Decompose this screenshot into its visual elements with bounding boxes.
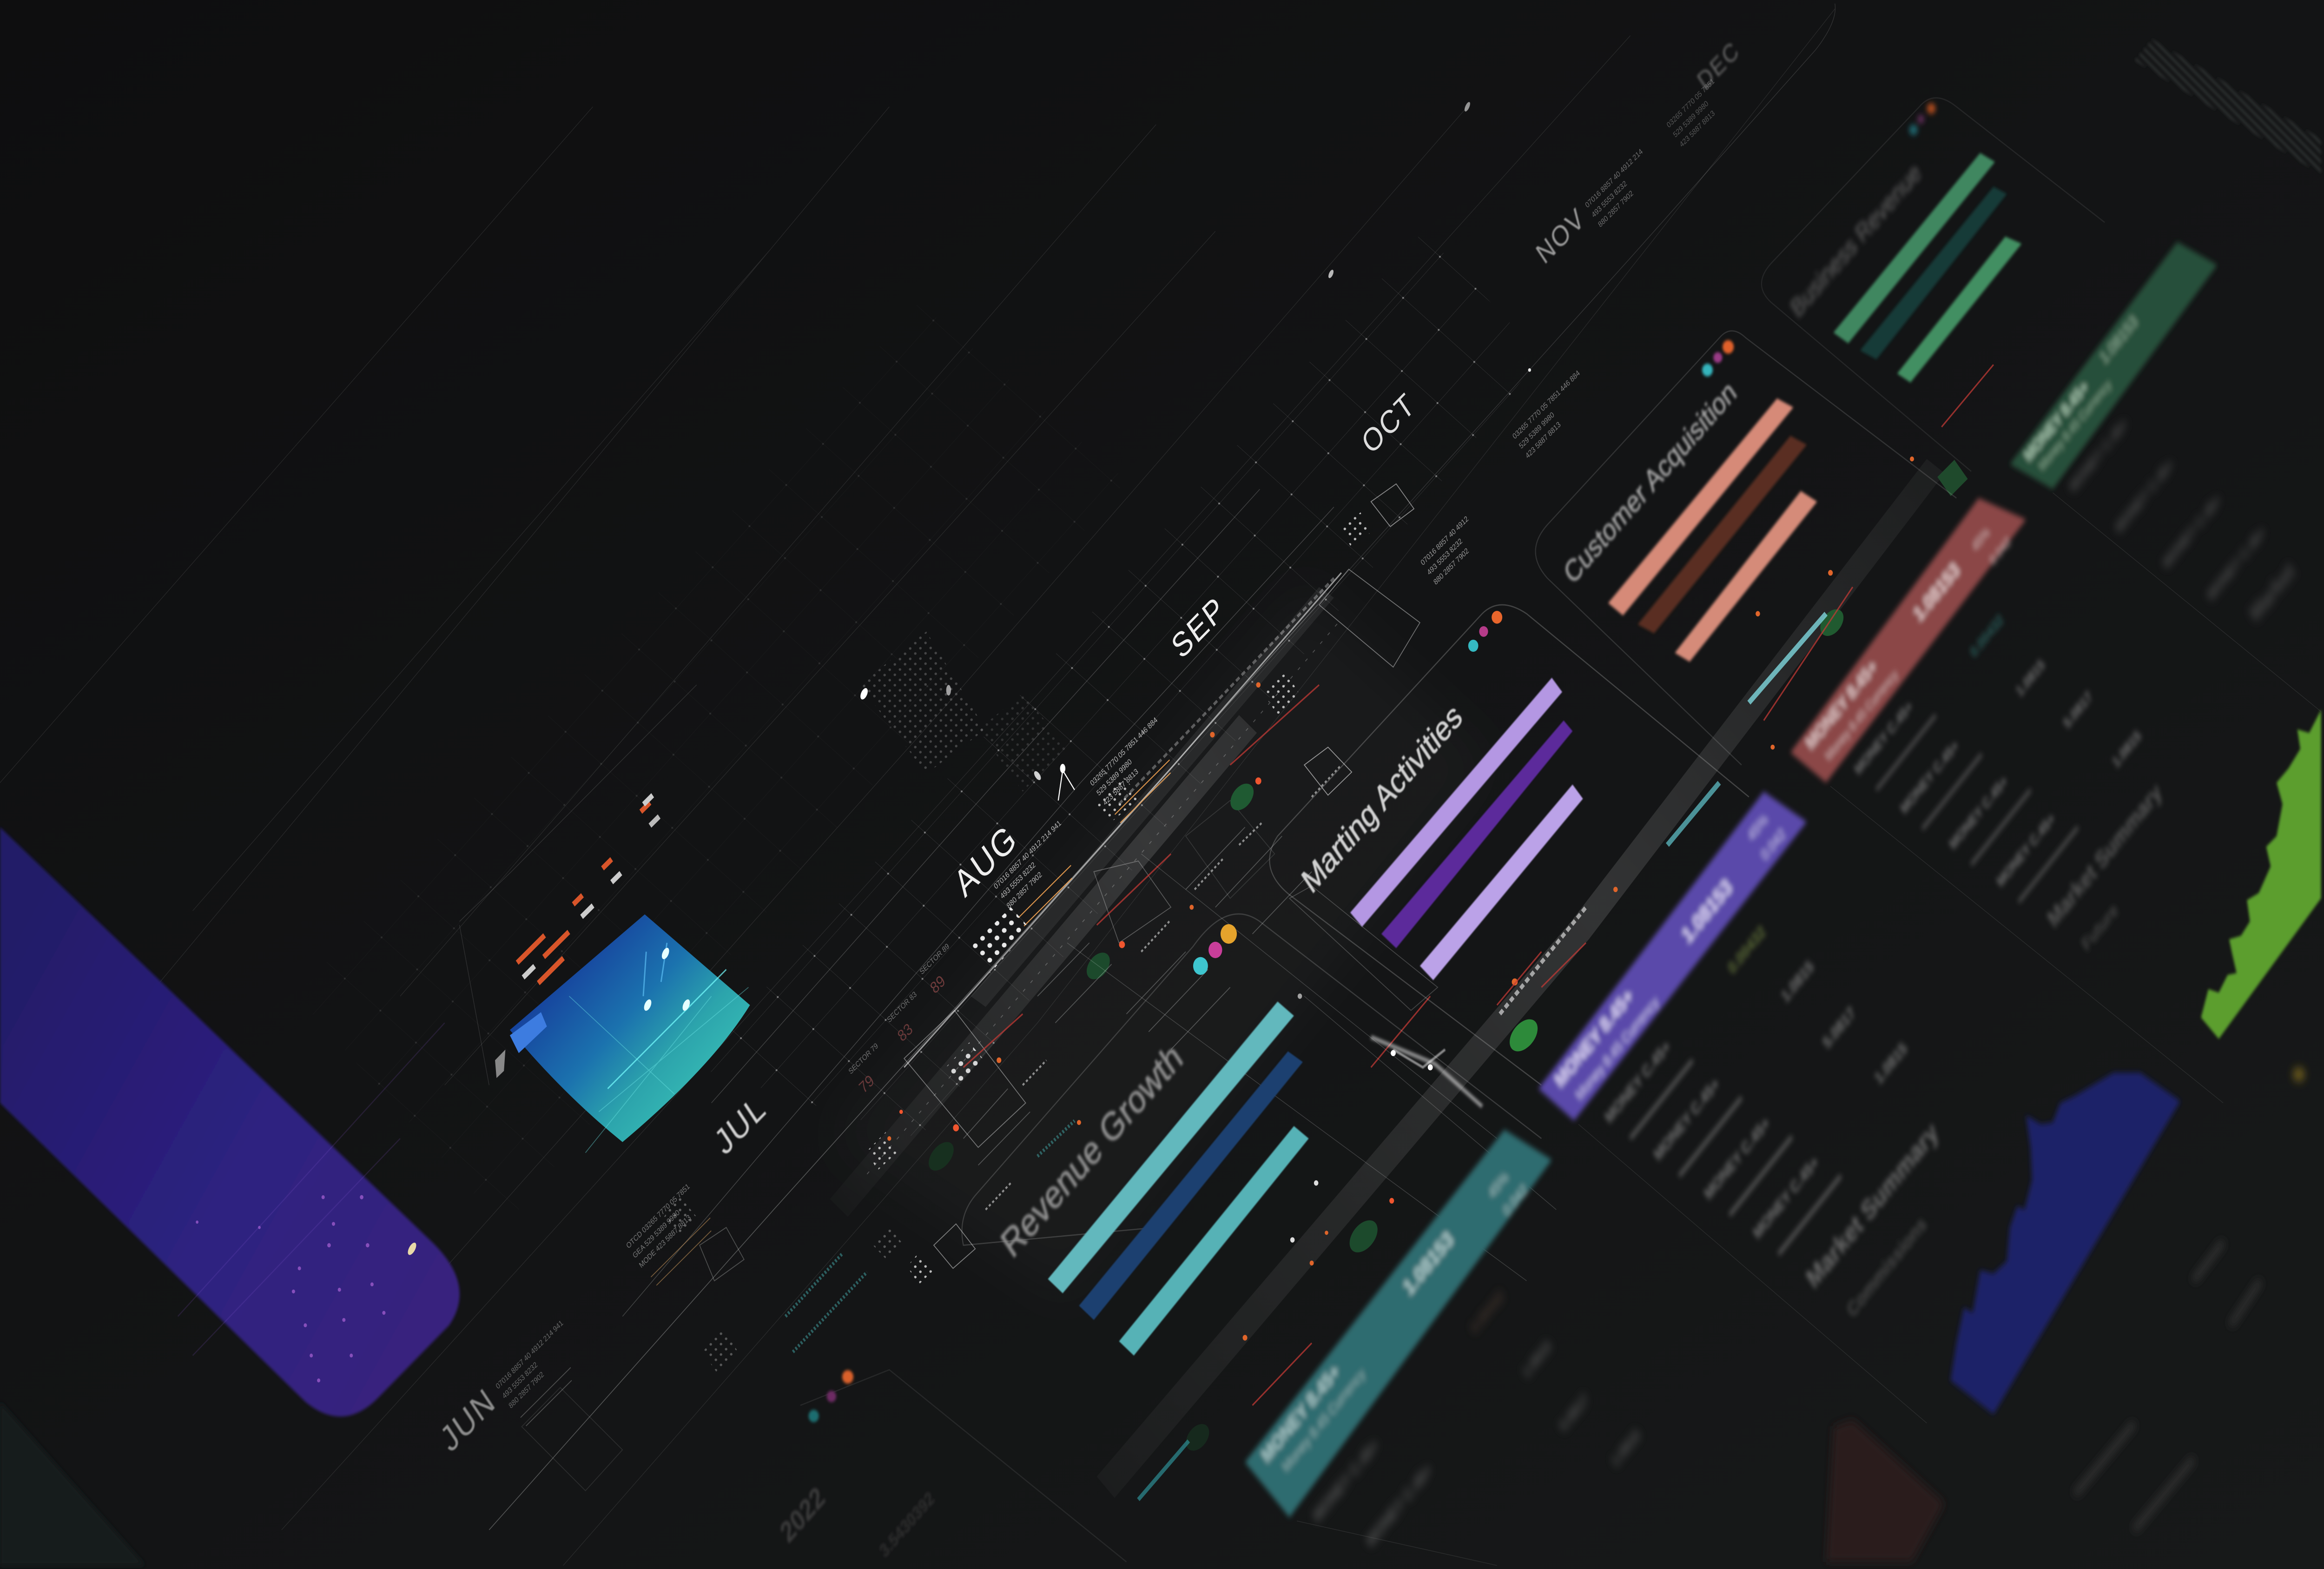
summary rows: green column: MONEY C.45+	[2205, 523, 2268, 604]
summary rows: teal column: 1.0815	[1520, 1337, 1554, 1381]
card: 2022 lower left	[776, 1370, 1126, 1562]
sub label: 3.5430392	[877, 1488, 938, 1562]
summary rows: teal column: 5.0817	[1557, 1391, 1591, 1435]
summary rows: purple column: 5.0817	[1820, 1003, 1858, 1053]
chart: green area	[2201, 710, 2321, 1039]
bars	[1834, 153, 2021, 383]
band labels: MONEY 8.45+	[1552, 985, 1637, 1092]
hud: numeric readouts along the timeline: 880 2857 7902	[1005, 870, 1043, 910]
panel: green summary band: Money 8.45 Currency	[2037, 377, 2113, 474]
hub traces and node lights	[786, 578, 1826, 1500]
glow highlights	[859, 101, 1531, 801]
summary rows: red column: 0.00432	[1968, 611, 2006, 661]
decorative hatch, top right	[2134, 39, 2321, 174]
bars	[1350, 678, 1583, 980]
month labels	[434, 36, 1744, 1459]
panel: red summary band: 0.042	[1988, 535, 2013, 568]
status dots	[1193, 924, 1237, 975]
hud: numeric readouts along the timeline: 07016 8857 40 4912 214	[1584, 147, 1644, 210]
summary rows: red column: 1.0815	[2014, 656, 2047, 700]
summary rows: purple column: MONEY C.45+	[1702, 1113, 1773, 1204]
hud: numeric readouts along the timeline: 493 5553 8232	[501, 1361, 539, 1401]
panel: blue-teal screen	[495, 914, 750, 1153]
panel: violet gradient band	[0, 827, 460, 1417]
summary rows: teal column: MONEY C.45+	[1310, 1435, 1381, 1525]
section title: Market Summary	[2043, 778, 2166, 933]
bars	[1608, 398, 1817, 662]
panel: red summary band: 1.08153	[1911, 558, 1963, 626]
summary rows: red column: Future	[2079, 900, 2121, 955]
panel: teal summary band: Money 8.45 Currency	[1280, 1365, 1368, 1476]
hud: numeric readouts along the timeline: OTCD 03265 7770 05 7851	[625, 1182, 691, 1251]
title: Customer Acquisition	[1559, 375, 1741, 590]
hud: numeric readouts along the timeline: SECTOR 83	[886, 990, 918, 1025]
central soft glow	[830, 587, 1497, 1298]
band dots and highlight	[178, 1023, 445, 1383]
summary rows: red column: MONEY C.45+	[1898, 737, 1961, 817]
hud: numeric readouts along the timeline: 07016 8857 40 4912 214 941	[993, 819, 1063, 891]
card: Business Revenue	[1762, 98, 2105, 471]
month: AUG: AUG	[947, 816, 1023, 905]
panel: green summary band	[2010, 242, 2217, 489]
panel: bottom-left teal corner	[0, 1402, 145, 1565]
title: Business Revenue	[1786, 158, 1925, 323]
summary rows: green column: MONEY C.45+	[2067, 415, 2130, 496]
summary rows: purple column: 1.0815	[1778, 957, 1816, 1006]
panel: purple summary band: 1.08153	[1678, 874, 1736, 948]
summary rows: purple column: 1.0815	[1872, 1039, 1910, 1088]
hud: numeric readouts along the timeline: 79	[856, 1071, 877, 1097]
panel: purple summary band: Money 8.45 Currency	[1573, 993, 1661, 1104]
far right faint details	[2075, 1067, 2305, 1530]
month: OCT: OCT	[1356, 386, 1421, 461]
schematic square outlines	[522, 484, 1438, 1491]
status dots	[808, 1370, 853, 1422]
card: Customer Acquisition	[1536, 331, 1956, 765]
month: JUN: JUN	[434, 1380, 502, 1459]
hud: numeric readouts along the timeline: 493 5553 8232	[1426, 537, 1464, 577]
panel: teal summary band: 45%	[1486, 1169, 1511, 1202]
panel: purple summary band: 45%	[1745, 811, 1770, 844]
hud: numeric readouts along the timeline: 423 5887 8813	[1524, 420, 1562, 460]
hud: numeric readouts along the timeline: 880 2857 7902	[508, 1370, 545, 1410]
panel: purple summary band	[1538, 792, 1807, 1121]
summary rows: red column	[1852, 611, 2166, 955]
hud: numeric readouts along the timeline: 493 5553 8232	[999, 861, 1037, 901]
chart: dark red area	[1826, 1420, 1945, 1562]
title: Marting Activities	[1296, 696, 1468, 900]
hud: numeric readouts along the timeline: 529 5389 9980	[1518, 410, 1556, 450]
card: Marting Activities	[1269, 605, 1749, 1085]
summary rows: purple column: MONEY C.45+	[1602, 1037, 1673, 1127]
hud: numeric readouts along the timeline: GEA 529 5389 9980	[632, 1208, 681, 1260]
summary rows: teal column	[1310, 1287, 1643, 1550]
bars	[1048, 1001, 1309, 1356]
summary rows: purple column: MONEY C.45+	[1750, 1152, 1822, 1243]
panel: red summary band	[1790, 498, 2026, 783]
summary rows: purple column: MONEY C.45+	[1651, 1074, 1722, 1165]
dot matrix clusters	[664, 512, 1369, 1373]
band labels: MONEY 8.45+	[2021, 377, 2091, 465]
month: SEP: SEP	[1166, 589, 1231, 666]
summary rows: purple column	[1602, 922, 1943, 1322]
hud: numeric readouts along the timeline: 07016 8857 40 4912	[1419, 515, 1470, 567]
hud: numeric readouts along the timeline: 423 5887 8813	[1678, 109, 1717, 149]
summary rows: teal column: MONEY C.45+	[1364, 1460, 1434, 1550]
summary rows: green column	[2067, 415, 2298, 627]
status dots	[1702, 340, 1734, 377]
hud: numeric readouts along the timeline: 529 5389 9980	[1672, 99, 1710, 139]
month: DEC: DEC	[1693, 36, 1744, 95]
hud: numeric readouts along the timeline: 03265 7770 05 7851	[1665, 77, 1716, 130]
summary rows: green column: MONEY C.45+	[2160, 492, 2224, 572]
hud: numeric readouts along the timeline	[495, 77, 1729, 1428]
hud: numeric readouts along the timeline: 03265 7770 05 7851 446 884	[1512, 369, 1582, 441]
summary rows: red column: MONEY C.45+	[1852, 698, 1915, 778]
section title: Market	[2246, 558, 2298, 627]
chart: blue area	[1950, 1072, 2180, 1414]
screen streaks and glows	[495, 943, 748, 1153]
hud: numeric readouts along the timeline: 07016 8857 40 4912 214 941	[495, 1319, 565, 1391]
section title: Market Summary	[1802, 1117, 1943, 1294]
hud: numeric readouts along the timeline: 89	[927, 972, 948, 997]
status dots	[1909, 103, 1936, 135]
hud: numeric readouts along the timeline: MODE 423 5887 8813	[638, 1213, 692, 1270]
summary rows: purple column: Commissions	[1844, 1212, 1930, 1322]
card: Revenue Growth	[962, 914, 1541, 1356]
band labels: MONEY 8.45+	[1803, 655, 1880, 754]
panel: red summary band: 45%	[1970, 525, 1992, 554]
summary rows: red column: MONEY C.45+	[1994, 810, 2058, 890]
hud: orange readouts	[460, 685, 697, 1085]
summary rows: red column: 1.0815	[2110, 728, 2144, 771]
band labels: MONEY 8.45+	[1259, 1360, 1343, 1468]
hud: numeric readouts along the timeline: 83	[895, 1020, 915, 1045]
belt markers	[887, 364, 1994, 1456]
hud: numeric readouts along the timeline: 880 2857 7902	[1433, 547, 1470, 587]
summary rows: teal column: 0.00432	[1468, 1287, 1506, 1337]
panel: teal summary band: 0.042	[1501, 1181, 1530, 1219]
title: Revenue Growth	[995, 1035, 1189, 1266]
summary rows: red column: 5.0817	[2061, 689, 2095, 732]
summary rows: purple column: 0.00432	[1725, 922, 1768, 978]
hud: numeric readouts along the timeline: SECTOR 89	[918, 942, 951, 976]
month: JUL: JUL	[708, 1086, 772, 1162]
year label: 2022	[776, 1481, 830, 1549]
panel: red summary band: Money 8.45 Currency	[1823, 667, 1900, 764]
summary rows: teal column: 1.0815	[1609, 1426, 1643, 1470]
status dots	[1468, 611, 1502, 652]
summary rows: green column: MONEY C.45+	[2113, 456, 2176, 536]
hud: numeric readouts along the timeline: 493 5553 8232	[1591, 179, 1628, 219]
hud: numeric readouts along the timeline: SECTOR 79	[847, 1042, 879, 1076]
hud: numeric readouts along the timeline: 529 5389 9980	[1096, 757, 1134, 798]
summary rows: red column: MONEY C.45+	[1947, 773, 2010, 853]
month: NOV: NOV	[1531, 201, 1590, 270]
hud: numeric readouts along the timeline: 880 2857 7902	[1597, 189, 1635, 229]
panel: green summary band: 1.08153	[2097, 312, 2140, 367]
data belts	[830, 364, 1994, 1498]
panel: teal summary band	[1245, 1130, 1552, 1517]
panel: purple summary band: 0.042	[1759, 826, 1788, 864]
panel: teal summary band: 1.08153	[1400, 1226, 1457, 1301]
hud: numeric readouts along the timeline: 03265 7770 05 7851 446 884	[1089, 715, 1159, 788]
hud: numeric readouts along the timeline: 423 5887 8813	[1102, 767, 1140, 807]
